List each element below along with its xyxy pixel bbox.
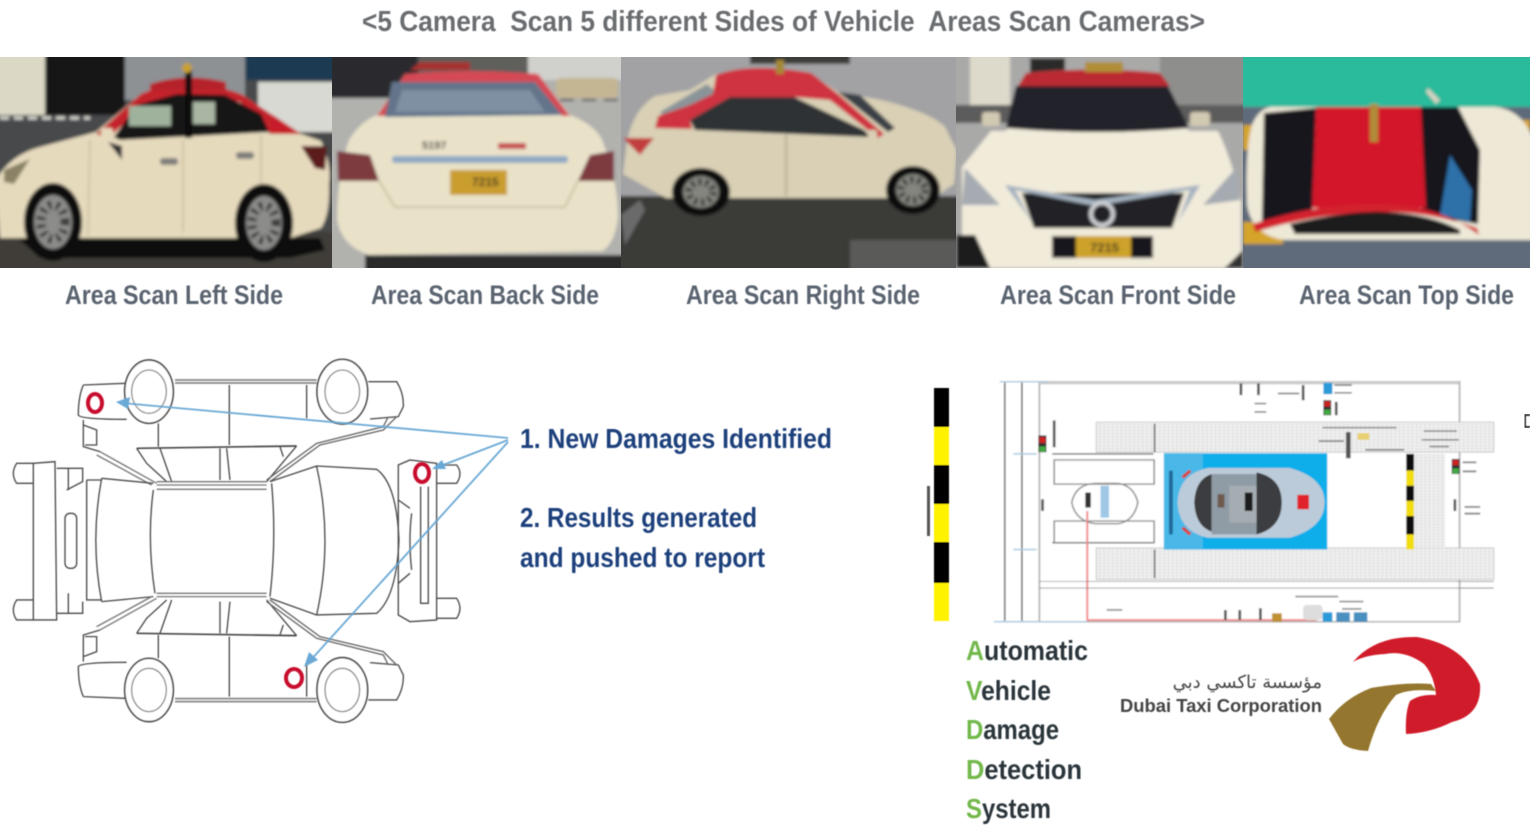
car outline: lower side view bbox=[78, 597, 403, 722]
striped marker pole bbox=[927, 388, 949, 621]
text: damages identified: 1. New Damages Identified bbox=[520, 423, 832, 454]
text: results generated bbox=[520, 502, 765, 573]
caption: back side: Area Scan Back Side bbox=[371, 280, 599, 310]
system name: AVDDS: Automatic bbox=[966, 635, 1088, 666]
car outline: rear bumper view bbox=[13, 462, 83, 620]
traffic lights bbox=[1039, 400, 1460, 474]
caption: left side: Area Scan Left Side bbox=[65, 280, 283, 310]
text: results generated: and pushed to report bbox=[520, 542, 765, 573]
car outline: top view bbox=[87, 466, 399, 615]
system name: AVDDS bbox=[966, 635, 1088, 824]
exit pole bbox=[1346, 432, 1414, 550]
damage markers bbox=[88, 394, 429, 687]
system name: AVDDS: System bbox=[966, 793, 1051, 824]
company name bbox=[1120, 672, 1322, 716]
company name: Dubai Taxi Corporation bbox=[1120, 696, 1322, 716]
photo: taxi top side bbox=[1238, 52, 1530, 273]
photo: taxi back side bbox=[328, 52, 625, 273]
company name: مؤسسة تاكسي دبي bbox=[1173, 672, 1322, 693]
system name: AVDDS: Damage bbox=[966, 714, 1059, 745]
logo: Dubai Taxi bbox=[1329, 637, 1480, 751]
stray box at right edge bbox=[1525, 415, 1530, 427]
photo: taxi back side: 5197 bbox=[422, 140, 446, 152]
photo: taxi back side: 7215 bbox=[472, 175, 499, 189]
entry lane and small car bbox=[1052, 424, 1155, 578]
grid lanes bbox=[1096, 422, 1494, 580]
photo: taxi right side bbox=[616, 52, 961, 273]
photo: taxi front side bbox=[952, 52, 1248, 273]
system name: AVDDS: Vehicle bbox=[966, 675, 1051, 706]
blue scan bay bbox=[1164, 453, 1327, 550]
photo: taxi left side bbox=[0, 52, 337, 273]
arrows from text to damages bbox=[116, 397, 508, 667]
vehicle damage line diagram bbox=[13, 359, 460, 722]
caption: right side: Area Scan Right Side bbox=[686, 280, 920, 310]
car outline: upper side view bbox=[78, 359, 403, 485]
cable run and control boxes bbox=[1039, 383, 1494, 622]
car outline: front bumper view bbox=[398, 460, 460, 622]
photo: taxi front side: 7215 bbox=[1090, 240, 1119, 255]
system name: AVDDS: Detection bbox=[966, 754, 1082, 785]
caption: front side: Area Scan Front Side bbox=[1000, 280, 1236, 310]
floor plan of scan station bbox=[994, 382, 1494, 622]
text: results generated: 2. Results generated bbox=[520, 502, 757, 533]
title: <5 Camera Scan 5 different Sides of Vehicle Areas Scan Cameras> bbox=[362, 6, 1205, 38]
